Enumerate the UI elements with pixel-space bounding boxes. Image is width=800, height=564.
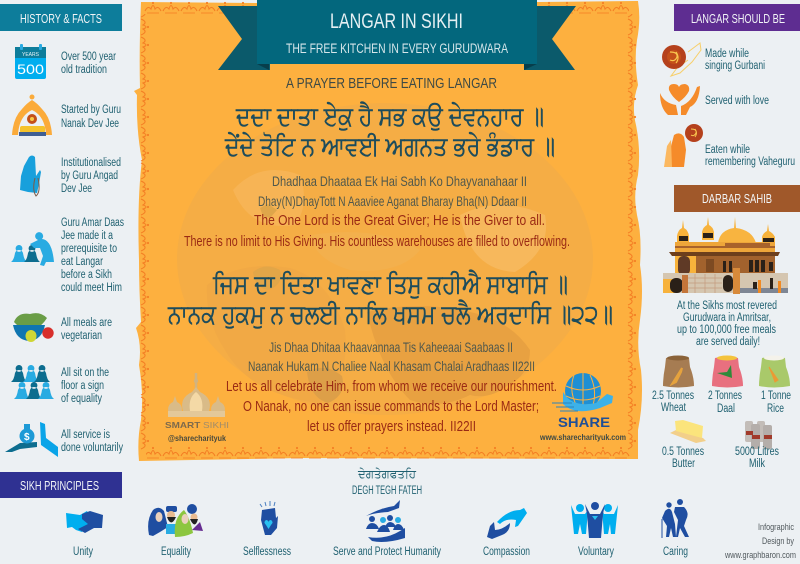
text: daal: Daal — [717, 403, 735, 415]
text: milk: 5000 Litres — [735, 446, 779, 458]
icon: vegetarian bowl — [13, 313, 54, 342]
icon: rice sack — [759, 356, 790, 388]
text: voluntary — [61, 429, 123, 454]
icon: butter — [670, 420, 706, 443]
subtitle: THE FREE KITCHEN IN EVERY GURUDWARA — [286, 41, 508, 56]
icon: equality figures — [148, 504, 203, 537]
prayer verse one: The One Lord is the Great Giver; He is the Giver to all. — [254, 213, 545, 229]
text: equality — [61, 367, 109, 405]
text: institutionalised: Dev Jee — [61, 183, 92, 195]
text: equality: All sit on the — [61, 367, 109, 379]
icon: caring elderly couple — [662, 499, 689, 538]
icon: people seated in rows — [11, 365, 54, 399]
text: made while singing: singing Gurbani — [705, 60, 765, 72]
text: daal — [708, 390, 742, 415]
icon: volunteers — [571, 502, 618, 538]
text: prerequisite — [61, 217, 124, 294]
prayer verse two: Naanak Hukam N Chaliee Naal Khasam Chalai Aradhaas II22II — [248, 358, 535, 374]
prayer verse two: Let us all celebrate Him, from whom we receive our nourishment. — [226, 379, 557, 395]
text: wheat: 2.5 Tonnes — [652, 390, 694, 402]
icon: daal sack — [712, 356, 743, 388]
prayer verse two: ਨਾਨਕ ਹੁਕਮੁ ਨ ਚਲਈ ਨਾਲਿ ਖਸਮ ਚਲੈ ਅਰਦਾਸਿ ॥੨੨॥ — [167, 299, 613, 329]
icon: selfless hand — [260, 501, 278, 535]
text: started by — [61, 104, 121, 130]
principle labels: Equality — [161, 546, 191, 558]
prayer heading: A PRAYER BEFORE EATING LANGAR — [286, 75, 497, 92]
heading: sikh principles: SIKH PRINCIPLES — [20, 478, 99, 493]
text: prerequisite: could meet Him — [61, 282, 122, 294]
icon: calendar 500 years — [15, 44, 46, 79]
prayer verse one: Dhay(N)DhayTott N Aaaviee Aganat Bharay Bha(N) Ddaar II — [258, 193, 527, 209]
text: eaten while: Eaten while — [705, 144, 750, 156]
text: milk — [735, 446, 779, 470]
text: wheat — [652, 390, 694, 414]
icon: milk bottles — [745, 421, 772, 449]
logo: Share — [539, 373, 626, 442]
heading: darbar sahib — [674, 185, 800, 212]
principle labels: Voluntary — [578, 546, 614, 558]
text: voluntary: All service is — [61, 429, 110, 441]
text: started by: Started by Guru — [61, 104, 121, 116]
principle labels: Serve and Protect Humanity — [333, 546, 441, 558]
panel: sikh principles — [0, 467, 689, 558]
principle labels: Compassion — [483, 546, 530, 558]
prayer verse two: let us offer prayers instead. II22II — [307, 419, 476, 435]
prayer verse one: ਦਦਾ ਦਾਤਾ ਏਕੁ ਹੈ ਸਭ ਕਉ ਦੇਵਨਹਾਰ ॥ — [235, 101, 544, 131]
text: butter: 0.5 Tonnes — [662, 446, 704, 458]
heading: history and facts: HISTORY & FACTS — [20, 11, 102, 26]
icon: voluntary service hands — [5, 422, 58, 457]
prayer verse two: ਜਿਸ ਦਾ ਦਿਤਾ ਖਾਵਣਾ ਤਿਸੁ ਕਹੀਐ ਸਾਬਾਸਿ ॥ — [212, 269, 568, 299]
map globe backdrop — [177, 103, 593, 415]
heading: langar should be — [674, 4, 800, 31]
panel: history and facts — [0, 4, 124, 457]
prayer verse two: Jis Dhaa Dhitaa Khaavannaa Tis Kaheeaai Saabaas II — [269, 339, 513, 355]
text: vegetarian: vegetarian — [61, 330, 102, 342]
text: prerequisite: Guru Amar Daas — [61, 217, 124, 229]
text: institutionalised: by Guru Angad — [61, 170, 118, 182]
principle labels — [73, 546, 688, 558]
text: vegetarian: All meals are — [61, 317, 112, 329]
heading: sikh principles — [0, 472, 122, 498]
text: institutionalised — [61, 157, 121, 195]
icon: golden temple — [663, 217, 788, 294]
text: prerequisite: prerequisite to — [61, 243, 117, 255]
text: prerequisite: before a Sikh — [61, 269, 112, 281]
text: rice — [761, 390, 791, 415]
text: prerequisite: eat Langar — [61, 256, 103, 268]
icon: calendar 500 years: 500 — [17, 61, 44, 77]
text: prerequisite: Jee made it a — [61, 230, 113, 242]
logo: Share: www.sharecharityuk.com — [539, 432, 626, 442]
logo: Share: SHARE — [558, 414, 610, 430]
ornamental border — [137, 0, 638, 459]
logo: Smart Sikhi: @sharecharityuk — [168, 434, 226, 443]
icon: hands holding heart — [660, 84, 700, 115]
motto: degh tegh fateh: DEGH TEGH FATEH — [352, 485, 422, 497]
icon: hand with prayer beads — [20, 156, 41, 196]
principle labels: Selflessness — [243, 546, 291, 558]
text: served with love: Served with love — [705, 95, 769, 107]
panel: darbar sahib — [652, 185, 800, 470]
heading: history and facts — [0, 4, 122, 31]
text: tradition — [61, 51, 116, 76]
design credit — [724, 522, 796, 561]
logo: Smart Sikhi — [165, 373, 229, 443]
prayer verse one — [184, 101, 570, 250]
panel: prayer parchment — [134, 0, 642, 461]
motto: degh tegh fateh: ਦੇਗਤੇਗਫਤਹਿ — [357, 467, 417, 481]
text: vegetarian — [61, 317, 112, 342]
text: free meals: are served daily! — [696, 336, 760, 348]
icon: serving langar — [11, 232, 54, 266]
icon: khanda with music — [662, 43, 701, 76]
text: equality: floor a sign — [61, 380, 104, 392]
text: wheat: Wheat — [661, 402, 687, 414]
prayer verse one: Dhadhaa Dhaataa Ek Hai Sabh Ko Dhayvanahaar II — [272, 173, 527, 189]
motto: degh tegh fateh — [352, 467, 422, 497]
text: institutionalised: Institutionalised — [61, 157, 121, 169]
logo: Smart Sikhi: SMART SIKHI — [165, 420, 229, 430]
icon: praying hands with khanda — [664, 124, 703, 167]
prayer verse one: There is no limit to His Giving. His countless warehouses are filled to overflowing. — [184, 234, 570, 250]
text: free meals: Gurudwara in Amritsar, — [683, 312, 771, 324]
prayer verse two: O Nanak, no one can issue commands to the Lord Master; — [243, 399, 539, 415]
text: started by: Nanak Dev Jee — [61, 118, 119, 130]
text: butter — [662, 446, 704, 470]
text: equality: of equality — [61, 393, 102, 405]
title ribbon — [218, 0, 576, 70]
heading: darbar sahib: DARBAR SAHIB — [702, 191, 772, 206]
text: tradition: Over 500 year — [61, 51, 116, 63]
principle labels: Unity — [73, 546, 93, 558]
text: tradition: old tradition — [61, 64, 107, 76]
text: rice: Rice — [767, 403, 784, 415]
icon: wheat sack — [663, 356, 694, 388]
prayer verse one: ਦੇਂਦੇ ਤੋਟਿ ਨ ਆਵਈ ਅਗਨਤ ਭਰੇ ਭੰਡਾਰ ॥ — [224, 131, 555, 161]
text: eaten while — [705, 144, 795, 168]
icon: compassion hands — [487, 508, 527, 539]
text: made while singing: Made while — [705, 48, 749, 60]
text: milk: Milk — [749, 458, 765, 470]
principle labels: Caring — [663, 546, 688, 558]
title: LANGAR IN SIKHI — [330, 10, 463, 33]
icon: hands protecting people — [366, 500, 405, 542]
icon: calendar 500 years: YEARS — [22, 52, 39, 58]
text: voluntary: done voluntarily — [61, 442, 123, 454]
text: butter: Butter — [672, 458, 695, 470]
text: free meals — [677, 300, 777, 348]
panel: langar should be — [660, 4, 800, 168]
icon: unity handshake — [66, 511, 103, 533]
icon: voluntary service hands: $ — [24, 432, 30, 443]
text: daal: 2 Tonnes — [708, 390, 742, 402]
prayer verse two — [167, 269, 613, 435]
text: made while singing — [705, 48, 765, 72]
icon: guru shrine — [12, 94, 52, 136]
